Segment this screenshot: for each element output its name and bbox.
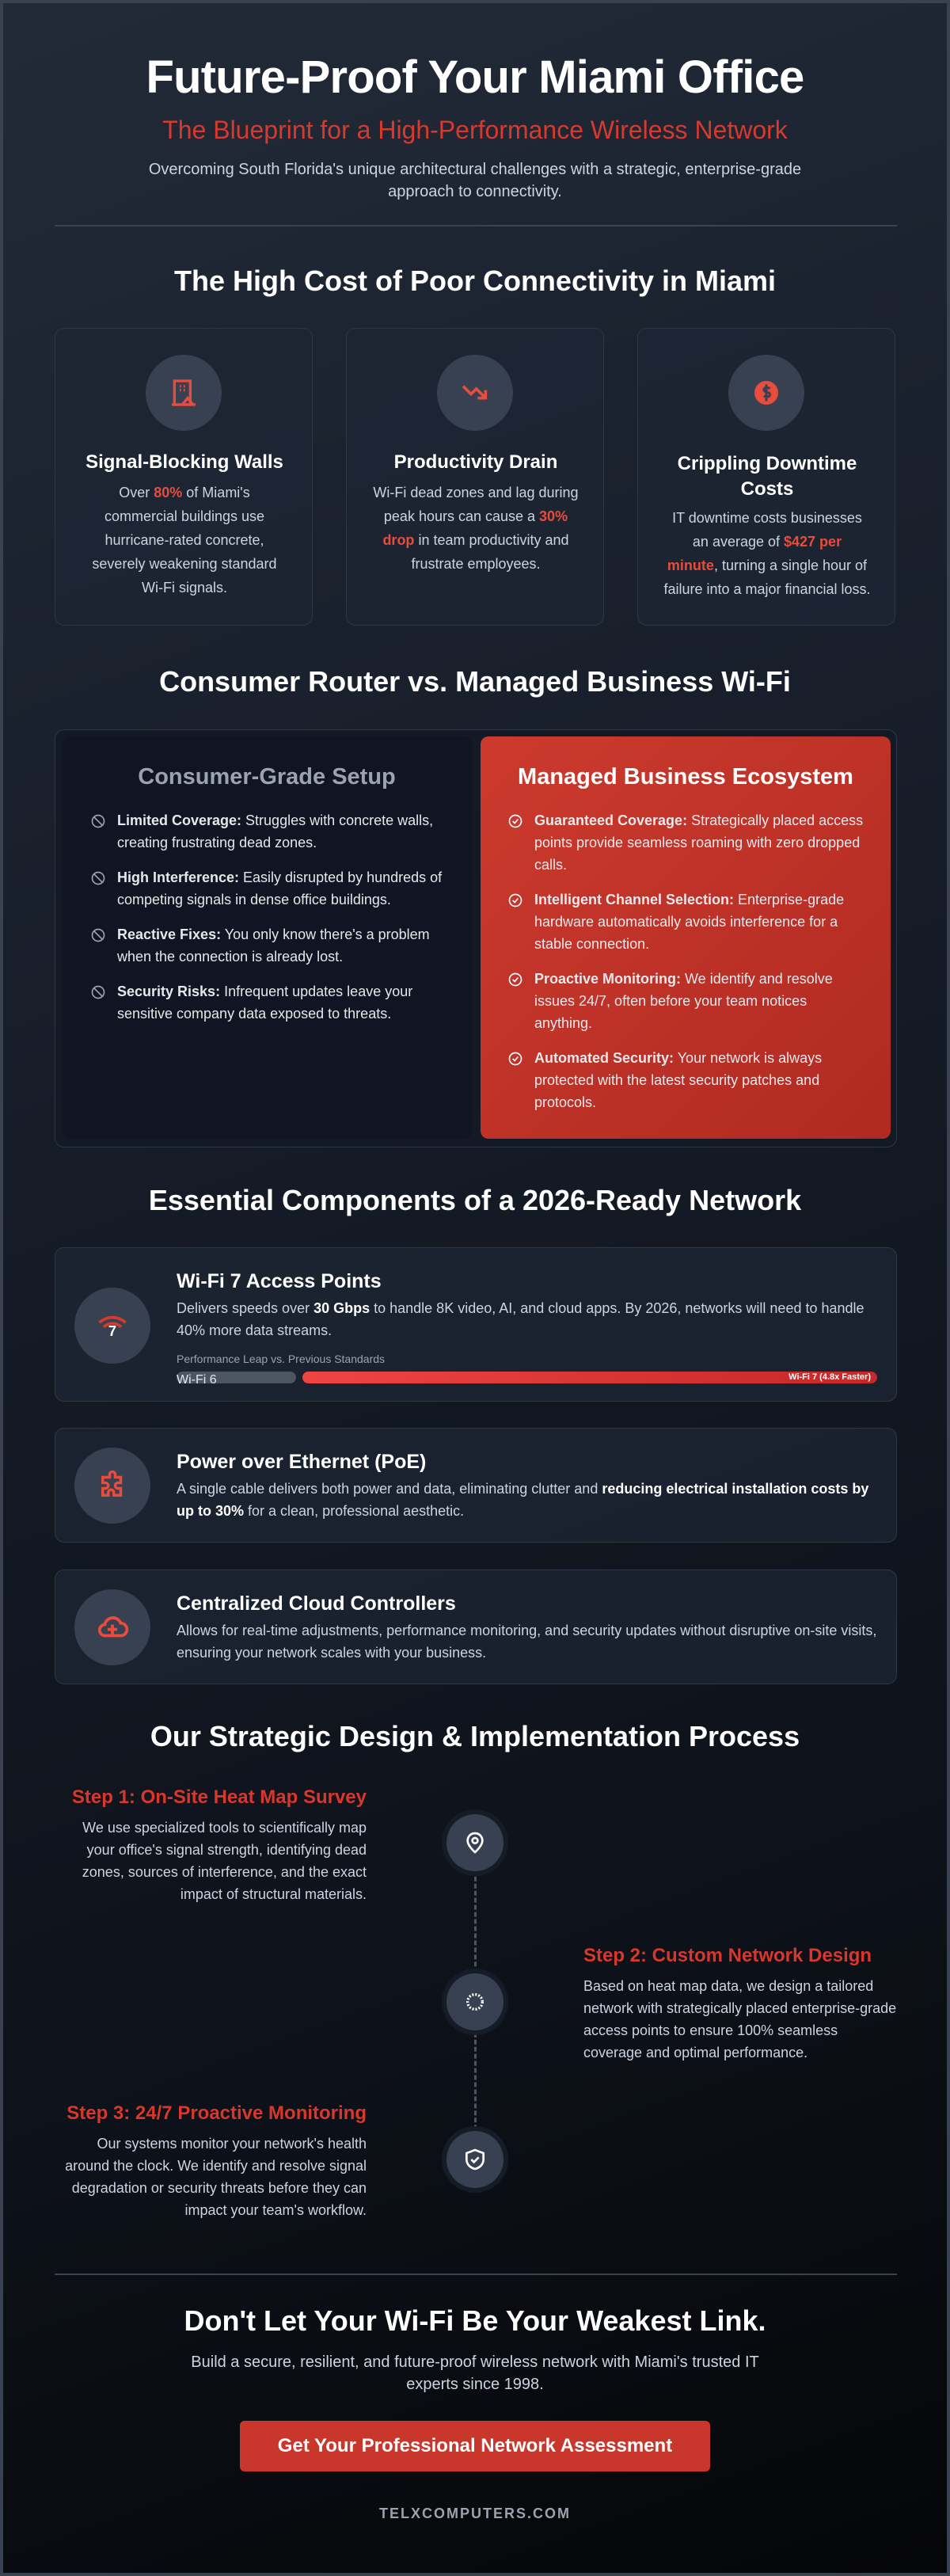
description: Allows for real-time adjustments, performance monitoring, and security updates without disruptive on-site visits, ensuring your network scales with your business. bbox=[177, 1623, 876, 1661]
icon: wifi 7: 7 bbox=[108, 1322, 116, 1339]
step 2: Based on heat map data, we design a tailored network with strategically placed enterprise-grade access points to ensure 100% seamless coverage and optimal performance. bbox=[583, 1978, 896, 2060]
panel: downtime costs bbox=[637, 328, 895, 626]
icon: cloud plus bbox=[74, 1589, 150, 1665]
title: Power over Ethernet (PoE) bbox=[177, 1451, 426, 1473]
CTA heading: Don't Let Your Wi-Fi Be Your Weakest Link. bbox=[184, 2304, 766, 2337]
footer: TELXCOMPUTERS.COM bbox=[379, 2506, 571, 2521]
list item: Guaranteed Coverage: Strategically placed access points provide seamless roaming with zero dropped calls. bbox=[534, 812, 863, 873]
card text: Wi-Fi dead zones and lag during peak hours can cause a 30% drop in team productivity and frustrate employees. bbox=[373, 485, 579, 572]
title: Future-Proof Your Miami Office bbox=[146, 51, 804, 103]
list item: Security Risks: Infrequent updates leave your sensitive company data exposed to threats. bbox=[117, 984, 412, 1022]
heading: Managed Business Ecosystem bbox=[518, 764, 853, 790]
heading: components: Essential Components of a 2026-Ready Network bbox=[149, 1184, 801, 1216]
panel: managed business bbox=[481, 736, 891, 1139]
icon: map pin bbox=[446, 1814, 504, 1871]
list item: Proactive Monitoring: We identify and resolve issues 24/7, often before your team notices anything. bbox=[534, 971, 833, 1031]
title: Wi-Fi 7 Access Points bbox=[177, 1270, 382, 1292]
step 3: Step 3: 24/7 Proactive Monitoring bbox=[66, 2102, 367, 2124]
step 1: Step 1: On-Site Heat Map Survey bbox=[72, 1786, 367, 1808]
list item: Intelligent Channel Selection: Enterprise-grade hardware automatically avoids interference for a stable connection. bbox=[534, 892, 844, 952]
card text: IT downtime costs businesses bbox=[672, 510, 862, 526]
icon: trend down bbox=[437, 355, 513, 431]
step 2: Step 2: Custom Network Design bbox=[583, 1945, 872, 1966]
list item: High Interference: Easily disrupted by hundreds of competing signals in dense office buildings. bbox=[117, 869, 442, 907]
bar chart: Wi-Fi 6 bbox=[177, 1373, 217, 1387]
icon: wifi 7 bbox=[74, 1288, 150, 1364]
card text: an average of $427 per bbox=[693, 534, 842, 550]
panel: PoE bbox=[55, 1428, 897, 1543]
card text bbox=[663, 510, 871, 597]
title: Centralized Cloud Controllers bbox=[177, 1592, 456, 1615]
panel: consumer-grade bbox=[62, 736, 472, 1139]
bar chart: Performance Leap vs. Previous Standards bbox=[177, 1353, 385, 1365]
description: Delivers speeds over 30 Gbps to handle 8K video, AI, and cloud apps. By 2026, networks will need to handle 40% more data streams. bbox=[177, 1300, 864, 1338]
card text: minute, turning a single hour of bbox=[667, 557, 867, 573]
card text: Over 80% of Miami's commercial buildings use hurricane-rated concrete, severely weakening standard Wi-Fi signals. bbox=[92, 485, 277, 595]
CTA text: Build a secure, resilient, and future-proof wireless network with Miami's trusted IT experts since 1998. bbox=[191, 2353, 759, 2393]
icon: dollar bbox=[728, 355, 804, 431]
bar chart: Wi-Fi 7 (4.8x Faster) bbox=[788, 1372, 871, 1382]
icon: loader bbox=[446, 1973, 504, 2030]
panel: comparison bbox=[55, 729, 897, 1147]
step 1: We use specialized tools to scientifically map your office's signal strength, identifying dead zones, sources of interference, and the exact impact of structural materials. bbox=[82, 1820, 367, 1902]
step 1 bbox=[72, 1786, 367, 1902]
icon: shield check bbox=[446, 2131, 504, 2188]
card title: Signal-Blocking Walls bbox=[86, 451, 283, 473]
intro text: Overcoming South Florida's unique architectural challenges with a strategic, enterprise-grade approach to connectivity. bbox=[149, 161, 801, 200]
heading: comparison: Consumer Router vs. Managed Business Wi-Fi bbox=[159, 665, 791, 698]
card text: failure into a major financial loss. bbox=[663, 581, 871, 597]
panel: signal-blocking walls bbox=[55, 328, 313, 626]
bar chart bbox=[177, 1353, 877, 1387]
CTA button bbox=[240, 2421, 710, 2471]
list item: Automated Security: Your network is always protected with the latest security patches and protocols. bbox=[534, 1050, 822, 1110]
icon: puzzle bbox=[74, 1448, 150, 1524]
CTA button: Get Your Professional Network Assessment bbox=[278, 2435, 672, 2456]
icon: building bbox=[146, 355, 222, 431]
heading: Consumer-Grade Setup bbox=[138, 764, 396, 790]
heading: process: Our Strategic Design & Implementation Process bbox=[150, 1720, 800, 1752]
panel: cloud controllers bbox=[55, 1570, 897, 1684]
step 3: Our systems monitor your network's health around the clock. We identify and resolve signal degradation or security threats before they can impact your team's workflow. bbox=[65, 2136, 367, 2218]
list item: Limited Coverage: Struggles with concrete walls, creating frustrating dead zones. bbox=[117, 812, 433, 850]
subtitle: The Blueprint for a High-Performance Wireless Network bbox=[162, 116, 788, 144]
list item: Reactive Fixes: You only know there's a problem when the connection is already lost. bbox=[117, 927, 430, 965]
card title: Crippling Downtime Costs bbox=[678, 453, 857, 500]
panel: wifi 7 bbox=[55, 1247, 897, 1402]
description: A single cable delivers both power and data, eliminating clutter and reducing electrical installation costs by up to 30% for a clean, professional aesthetic. bbox=[177, 1481, 868, 1519]
panel: productivity drain bbox=[346, 328, 604, 626]
card title: Productivity Drain bbox=[394, 451, 557, 473]
heading: high cost: The High Cost of Poor Connectivity in Miami bbox=[174, 264, 776, 297]
timeline line bbox=[474, 1848, 477, 2165]
